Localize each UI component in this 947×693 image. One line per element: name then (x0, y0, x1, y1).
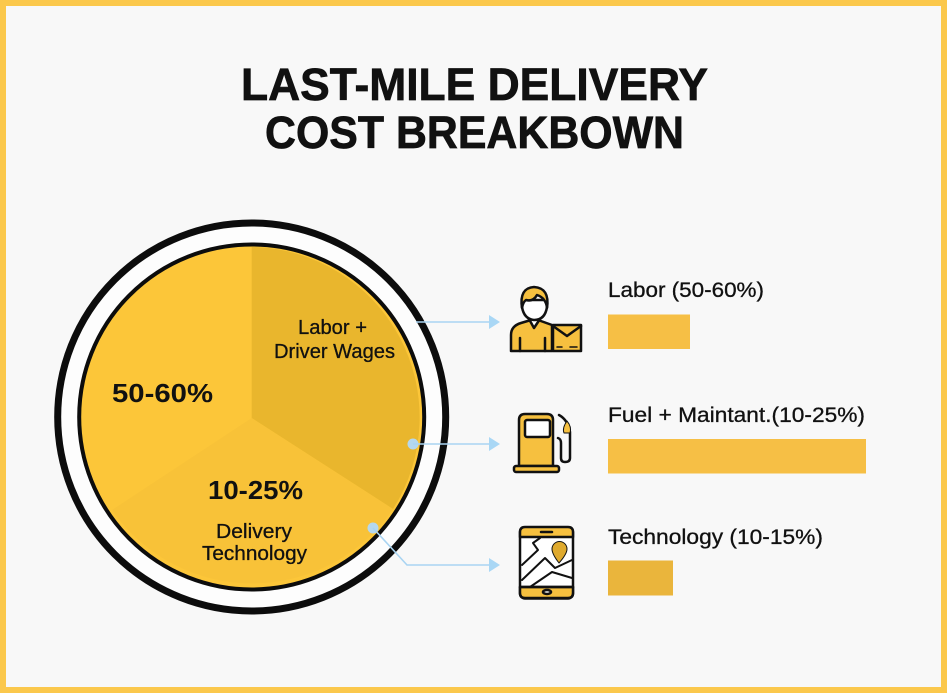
icon: fuel pump (514, 414, 571, 472)
legend label: Labor (50-60%) (608, 279, 764, 302)
legend label: Fuel + Maintant.(10-25%) (608, 404, 865, 427)
title (241, 59, 708, 158)
legend label: Technology (10-15%) (608, 526, 823, 549)
legend: technology (608, 526, 823, 596)
pie chart (58, 223, 446, 611)
label: labor + driver wages (274, 317, 395, 363)
title: COST BREAKBOWN (265, 107, 684, 158)
legend bar (608, 560, 673, 596)
arrow: technology (368, 522, 500, 572)
slice: left (79, 244, 424, 590)
icon: tablet map (520, 527, 573, 598)
outer ring (58, 223, 446, 611)
label: labor + driver wages: Driver Wages (274, 341, 395, 363)
legend: labor (608, 279, 764, 349)
arrow: fuel (408, 437, 500, 451)
label: delivery technology: Delivery (216, 521, 292, 543)
label: delivery technology: Technology (202, 543, 307, 565)
legend: fuel (608, 404, 866, 474)
legend bar (608, 439, 866, 474)
title: LAST-MILE DELIVERY (241, 59, 708, 110)
slice: labor (252, 247, 420, 509)
label: 50-60%: 50-60% (112, 378, 213, 408)
icon: delivery person (511, 287, 581, 351)
label: 10-25%: 10-25% (208, 475, 303, 505)
legend bar (608, 314, 690, 349)
slice: delivery technology (112, 418, 393, 583)
arrow: labor (416, 315, 500, 329)
label: delivery technology (202, 521, 307, 565)
label: labor + driver wages: Labor + (298, 317, 367, 339)
